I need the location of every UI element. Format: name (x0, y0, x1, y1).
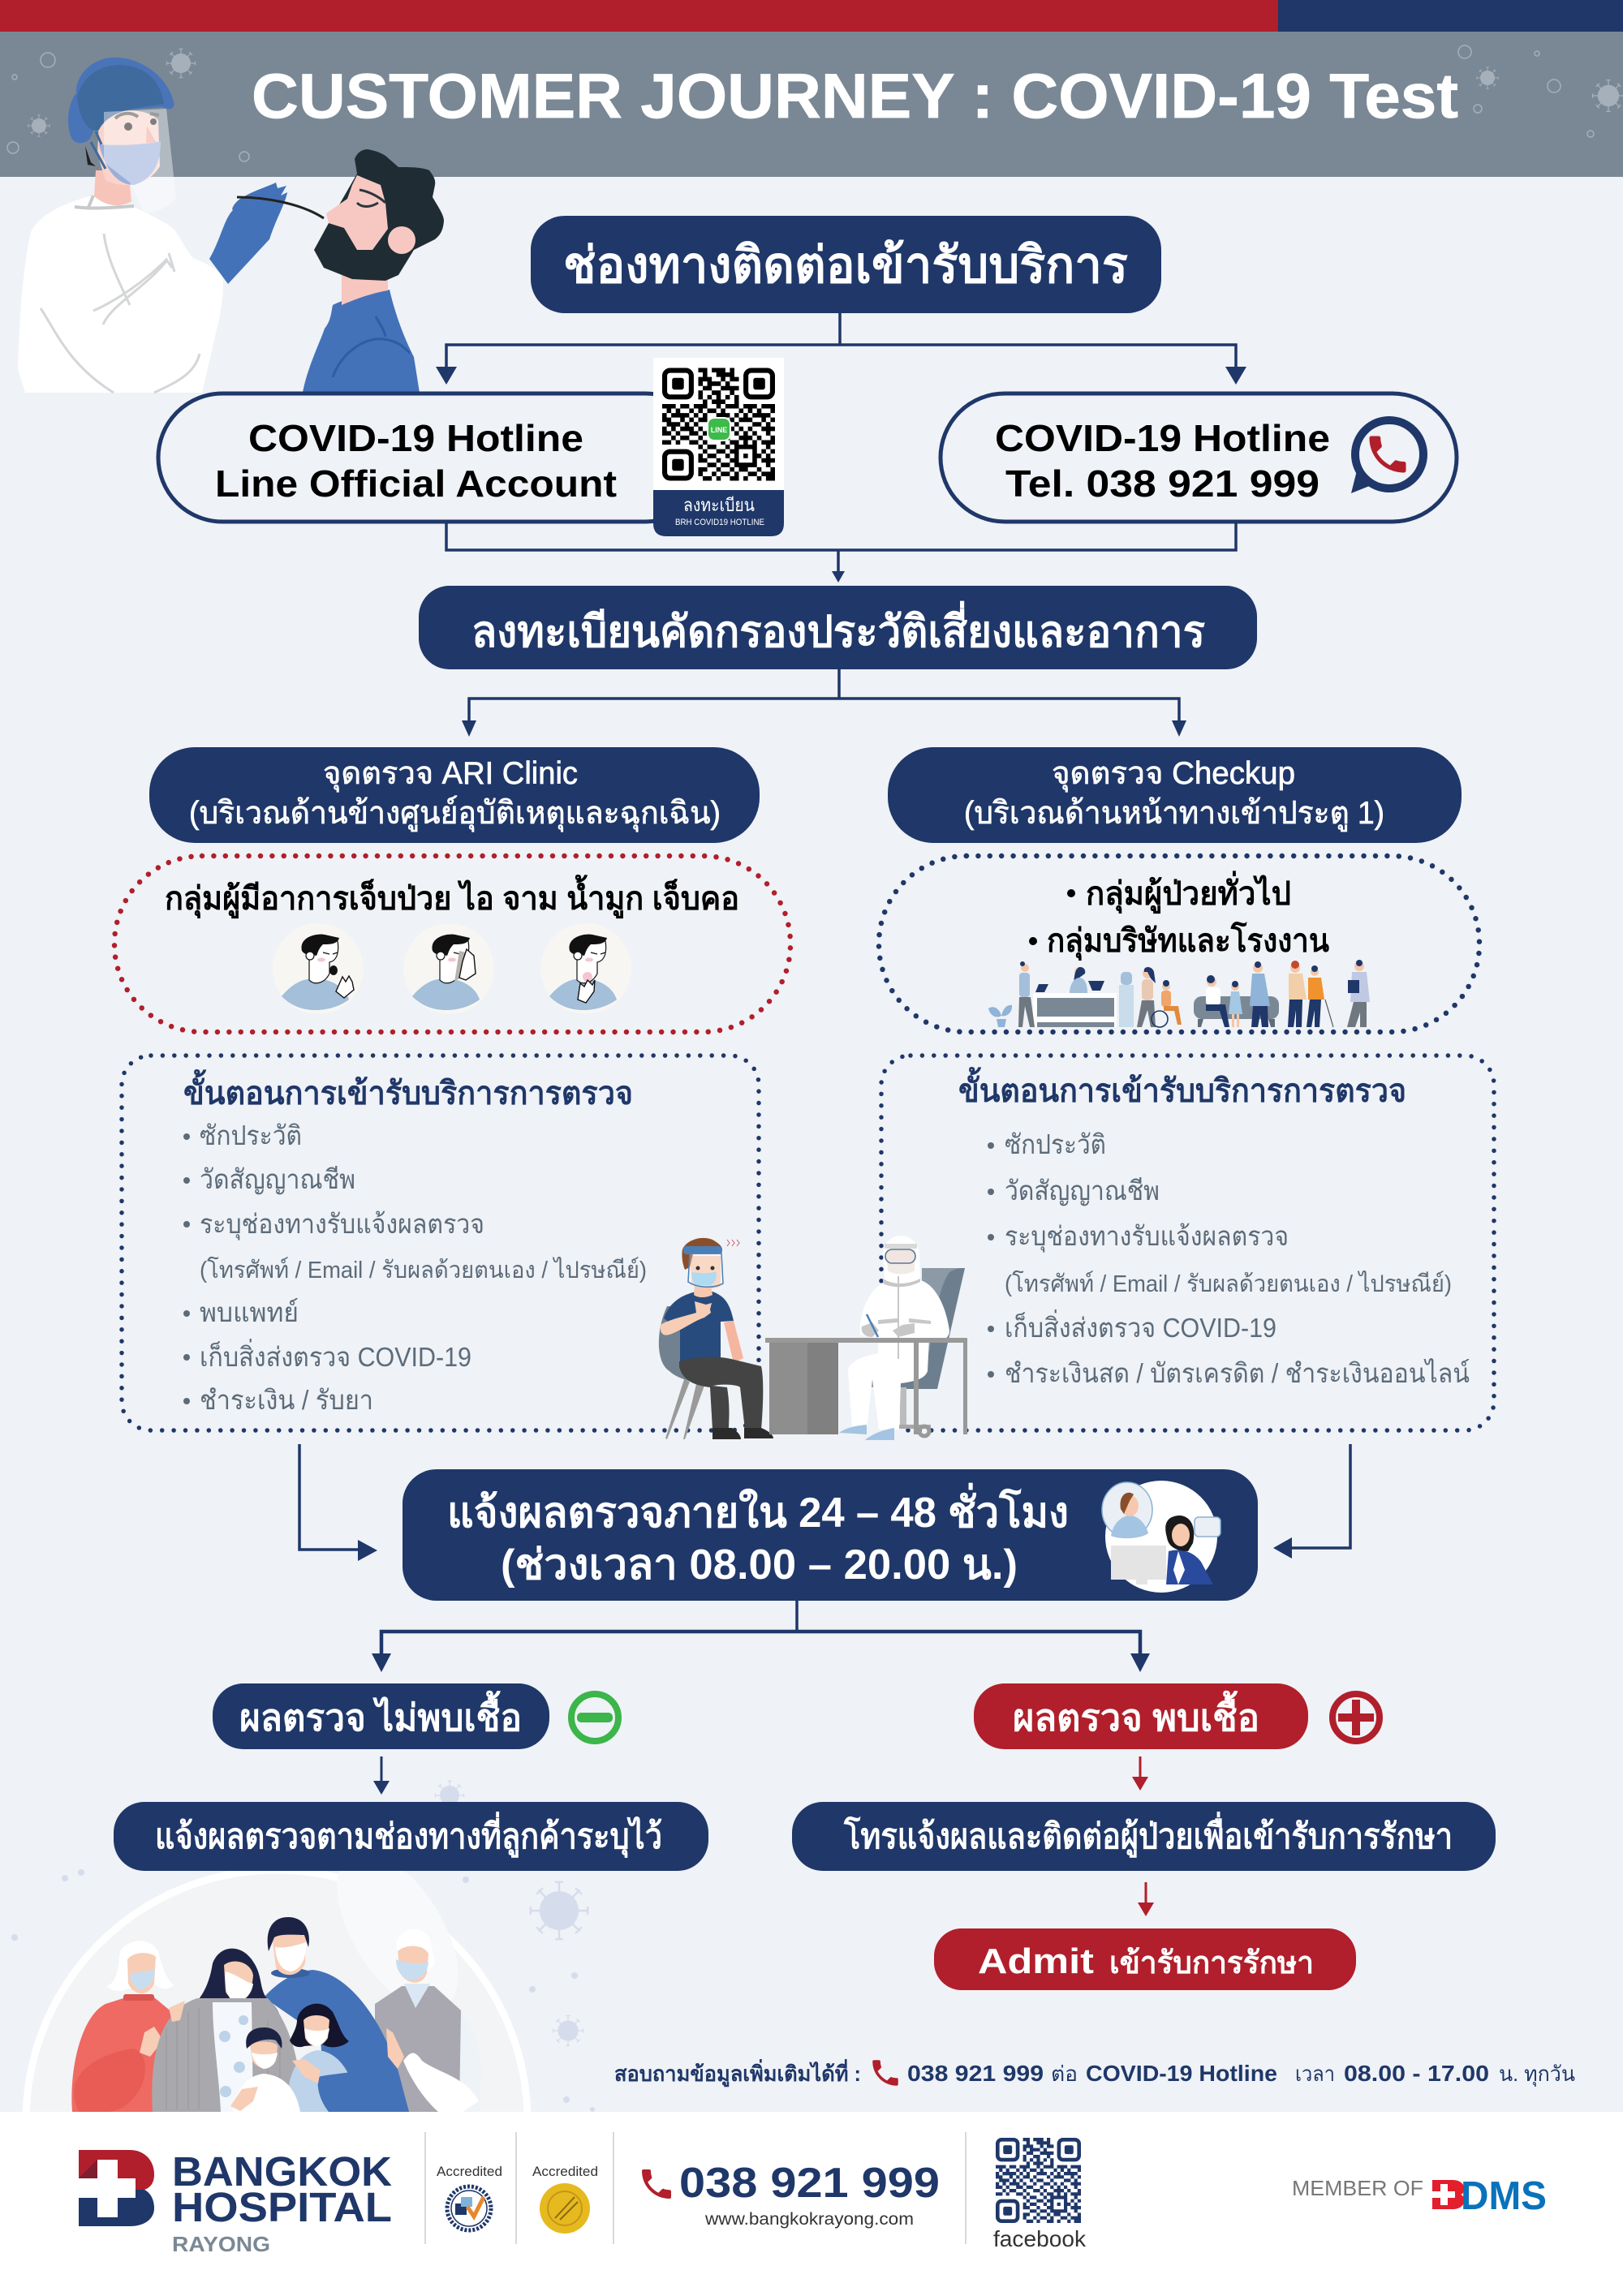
list: checkup steps: ชำระเงินสด / บัตรเครดิต / ชำระเงินออนไลน์ (1005, 1358, 1470, 1388)
contact information line: 038 921 999 (907, 2061, 1044, 2086)
doctor with clipboard (1347, 960, 1370, 1027)
medic glove (209, 183, 287, 284)
heading pill: results notification: แจ้งผลตรวจภายใน 24 – 48 ชั่วโมง (447, 1483, 1069, 1537)
patient chair (659, 1306, 740, 1439)
arrow: ARI to results (299, 1444, 377, 1561)
list: ARI steps: ชำระเงิน / รับยา (200, 1385, 373, 1415)
seated man and child (1206, 975, 1242, 1027)
logo: Bangkok Hospital: BANGKOK (172, 2148, 392, 2195)
mother (152, 1949, 302, 2112)
title: CUSTOMER JOURNEY : COVID-19 Test (252, 60, 1458, 131)
icon: phone bubble (1351, 420, 1423, 493)
medic gown (18, 196, 223, 393)
footer (0, 2112, 1623, 2296)
heading pill: checkup: จุดตรวจ Checkup (1052, 756, 1295, 793)
facebook QR (993, 2139, 1087, 2251)
heading: ARI steps: ขั้นตอนการเข้ารับบริการการตรวจ (183, 1069, 633, 1111)
text: general patients: กลุ่มบริษัทและโรงงาน (1047, 922, 1329, 961)
logo: Bangkok Hospital (79, 2148, 392, 2256)
connector: registration to clinics (462, 669, 1186, 737)
contact information line: เวลา (1295, 2062, 1335, 2086)
list: ARI steps: ซักประวัติ (200, 1120, 302, 1150)
caller bubble (1102, 1482, 1152, 1538)
connector: results to outcomes (372, 1601, 1150, 1672)
list: checkup steps: ระบุช่องทางรับแจ้งผลตรวจ (1005, 1221, 1289, 1253)
text: line hotline: Line Official Account (215, 462, 617, 505)
facebook QR: facebook (993, 2226, 1087, 2251)
doctor (1250, 961, 1270, 1027)
medic suit (839, 1236, 949, 1440)
illustration: patient and medic at desk (659, 1236, 967, 1440)
heading pill: results notification (403, 1469, 1258, 1601)
medic cap (68, 58, 174, 143)
pill: admit (934, 1928, 1356, 1990)
boy (230, 2027, 300, 2112)
panel: line official account (158, 358, 784, 536)
connector: contact channels to hotlines (436, 313, 1246, 385)
text: general patients: กลุ่มผู้ป่วยทั่วไป (1086, 871, 1291, 914)
background: lower viruses and dots (11, 1781, 595, 2112)
grandfather (375, 1929, 481, 2112)
girl's hand (292, 2059, 321, 2083)
phone number (642, 2160, 940, 2229)
text: telephone hotline: Tel. 038 921 999 (1005, 462, 1319, 505)
badge: hospital accreditation (437, 2164, 502, 2230)
grandmother (71, 1941, 182, 2112)
sofa (1194, 996, 1279, 1019)
swab (237, 197, 324, 218)
medic mask (99, 141, 161, 185)
phone number: 038 921 999 (679, 2160, 940, 2207)
pill: call patient for treatment: โทรแจ้งผลและติดต่อผู้ป่วยเพื่อเข้ารับการรักษา (843, 1812, 1453, 1858)
logo: Bangkok Hospital: HOSPITAL (172, 2184, 392, 2230)
arrow: checkup to results (1273, 1444, 1350, 1559)
receptionist (1070, 967, 1104, 993)
pill: negative result (213, 1683, 549, 1749)
list: checkup steps: วัดสัญญาณชีพ (1005, 1176, 1160, 1206)
badge: JCI gold seal: Accredited (532, 2164, 598, 2179)
contact information line: 08.00 - 17.00 (1344, 2061, 1489, 2086)
agent (1165, 1516, 1220, 1584)
desk (765, 1338, 967, 1434)
contact information line: COVID-19 Hotline (1086, 2061, 1277, 2086)
header band (0, 0, 1623, 177)
list: checkup steps: (โทรศัพท์ / Email / รับผลด้วยตนเอง / ไปรษณีย์) (1005, 1270, 1452, 1297)
wheelchair and pusher (1137, 967, 1182, 1027)
list: ARI steps: (โทรศัพท์ / Email / รับผลด้วยตนเอง / ไปรษณีย์) (200, 1256, 647, 1283)
text: line hotline: COVID-19 Hotline (248, 417, 583, 459)
list: ARI steps: วัดสัญญาณชีพ (200, 1164, 355, 1194)
patient hair and beard (314, 149, 444, 281)
heading pill: ARI clinic: (บริเวณด้านข้างศูนย์อุบัติเหตุและฉุกเฉิน) (189, 795, 721, 832)
badge: JCI gold seal (532, 2164, 598, 2234)
pill: positive result (974, 1683, 1308, 1749)
patient ear (388, 226, 415, 254)
text: general patients (1029, 871, 1329, 961)
list: checkup steps: ซักประวัติ (1005, 1129, 1106, 1159)
logo: member of BDMS: MEMBER OF (1292, 2176, 1423, 2200)
text: telephone hotline (995, 417, 1330, 505)
arrow: negative to notify (373, 1756, 390, 1795)
pill: notify through channel (114, 1802, 708, 1871)
pill: call patient for treatment (792, 1802, 1496, 1871)
arrow: positive to call (1132, 1756, 1148, 1791)
medic chair (867, 1268, 965, 1436)
staff standing (1018, 961, 1048, 1027)
pill: admit: Admit (978, 1941, 1094, 1981)
illustration: hospital lobby (988, 960, 1370, 1027)
elderly couple (1288, 961, 1333, 1027)
list: ARI steps: เก็บสิ่งส่งตรวจ COVID-19 (200, 1339, 471, 1372)
heading pill: contact channels (531, 216, 1161, 313)
panel: ARI service steps (122, 1056, 759, 1430)
heading pill: results notification: (ช่วงเวลา 08.00 – 20.00 น.) (501, 1541, 1018, 1589)
grandfather's sleeve and hand (386, 2028, 479, 2112)
panel: general group (879, 856, 1479, 1032)
patient face (326, 175, 388, 250)
connector: hotlines to registration (446, 523, 1236, 583)
QR card: ลงทะเบียน (683, 495, 755, 515)
text: telephone hotline: COVID-19 Hotline (995, 417, 1330, 459)
heading: checkup steps: ขั้นตอนการเข้ารับบริการการตรวจ (958, 1067, 1406, 1109)
list: ARI steps (183, 1120, 647, 1415)
plant (988, 1005, 1012, 1027)
badge: hospital accreditation: Accredited (437, 2164, 502, 2179)
illustration: medic swabbing patient (18, 58, 444, 393)
heading pill: registration: ลงทะเบียนคัดกรองประวัติเสี่ยงและอาการ (471, 600, 1205, 656)
pill: positive result: ผลตรวจ พบเชื้อ (1013, 1690, 1259, 1739)
panel: checkup service steps (881, 1056, 1494, 1430)
pill: notify through channel: แจ้งผลตรวจตามช่องทางที่ลูกค้าระบุไว้ (155, 1812, 662, 1859)
list: ARI steps: พบแพทย์ (200, 1297, 299, 1327)
heading pill: contact channels: ช่องทางติดต่อเข้ารับบริการ (563, 238, 1128, 294)
dividers (425, 2132, 966, 2244)
logo: member of BDMS: DMS (1461, 2174, 1547, 2218)
patient head (682, 1238, 739, 1297)
QR card: BRH COVID19 HOTLINE (675, 518, 764, 527)
heading pill: ARI clinic: จุดตรวจ ARI Clinic (323, 756, 578, 793)
icon: plus sign (1332, 1694, 1380, 1741)
reception desk (1033, 993, 1117, 1027)
water cooler (1119, 985, 1134, 1027)
panel: telephone hotline (941, 393, 1457, 522)
QR card (653, 358, 784, 536)
dome behind family (23, 1871, 531, 2112)
medic neck and face (94, 170, 131, 205)
logo: Bangkok Hospital: RAYONG (172, 2232, 270, 2256)
heading pill: checkup: (บริเวณด้านหน้าทางเข้าประตู 1) (964, 796, 1384, 832)
contact information line: ต่อ (1051, 2062, 1078, 2086)
heading pill: registration (419, 586, 1257, 669)
icon: runny-nose person (403, 923, 494, 1014)
father's arm (318, 2065, 409, 2112)
contact information line (614, 2058, 1575, 2087)
icon: coughing person (273, 923, 364, 1014)
QR card: LINE (711, 426, 727, 434)
phone number: www.bangkokrayong.com (704, 2210, 914, 2229)
contact information line: สอบถามข้อมูลเพิ่มเติมได้ที่ : (614, 2058, 861, 2087)
girl (287, 2004, 357, 2112)
text: symptom group: กลุ่มผู้มีอาการเจ็บป่วย ไอ จาม น้ำมูก เจ็บคอ (165, 875, 739, 919)
logo: member of BDMS (1292, 2174, 1547, 2218)
icon: call centre (1102, 1481, 1220, 1593)
icon: small phone (872, 2060, 898, 2086)
pill: admit: เข้ารับการรักษา (1109, 1946, 1314, 1980)
contact information line: น. ทุกวัน (1499, 2062, 1575, 2087)
list: checkup steps (988, 1129, 1470, 1388)
list: ARI steps: ระบุช่องทางรับแจ้งผลตรวจ (200, 1209, 484, 1240)
pill: negative result: ผลตรวจ ไม่พบเชื้อ (239, 1690, 522, 1739)
face shield (104, 109, 176, 214)
text: line hotline (215, 417, 617, 505)
icon: sore-throat person (540, 923, 631, 1014)
illustration: family in masks (71, 1917, 481, 2112)
heading pill: ARI clinic (149, 747, 760, 843)
heading pill: checkup (888, 747, 1462, 843)
list: checkup steps: เก็บสิ่งส่งตรวจ COVID-19 (1005, 1309, 1276, 1343)
father (264, 1917, 409, 2112)
icon: minus sign (571, 1694, 618, 1741)
patient neck (342, 268, 388, 305)
panel: symptomatic group (114, 856, 790, 1032)
arrow: call to admit (1138, 1882, 1154, 1916)
patient body (661, 1292, 773, 1439)
patient shirt (303, 290, 420, 393)
